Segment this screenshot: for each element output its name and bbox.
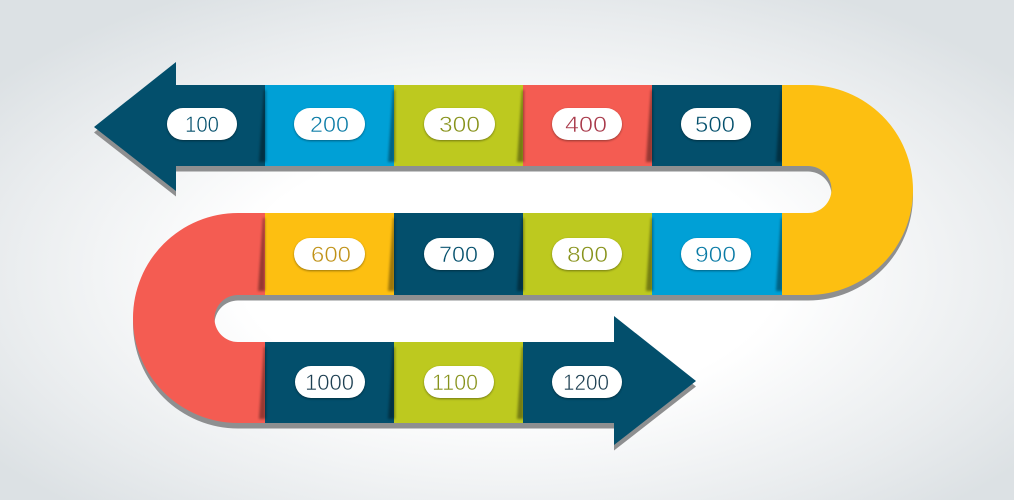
arrow head left: [94, 62, 265, 191]
row 1: arrow head and segments: [94, 62, 782, 191]
label 1100: [424, 366, 494, 398]
label 800: 800: [567, 242, 608, 267]
label 900: [681, 238, 751, 270]
path drop shadow: [94, 68, 913, 450]
label 1200: [552, 366, 622, 398]
label 1100: 1100: [432, 370, 478, 395]
row 2 segments: [264, 213, 782, 295]
segment 300: [394, 85, 523, 166]
label 500: [681, 108, 751, 140]
label 200: 200: [310, 112, 349, 137]
segment 400: [523, 85, 652, 166]
segment 1100: [394, 342, 523, 423]
label 400: [552, 108, 622, 140]
label 800: [552, 238, 622, 270]
label 500: 500: [695, 112, 735, 137]
label 400: 400: [565, 112, 607, 137]
segment 600: [264, 213, 394, 295]
segment 900: [652, 213, 782, 295]
segment 800: [523, 213, 652, 295]
label 600: [294, 238, 365, 270]
label 200: [294, 108, 365, 140]
label 1200: 1200: [563, 370, 609, 395]
label 100: 100: [185, 112, 219, 137]
label 100: [167, 108, 237, 140]
segment 1000: [265, 342, 394, 423]
label 700: [424, 238, 494, 270]
label 1000: [295, 366, 365, 398]
yellow U turn: [782, 85, 913, 295]
segment 500: [652, 85, 782, 166]
segment edge shadows: [259, 90, 783, 162]
pill shadows: [167, 109, 751, 399]
red U turn: [133, 213, 265, 423]
label 300: [424, 108, 495, 140]
label 1000: 1000: [305, 370, 354, 395]
segment 700: [394, 213, 523, 295]
label 600: 600: [311, 242, 351, 267]
arrow head right: [523, 316, 696, 445]
segment 200: [265, 85, 394, 166]
label 300: 300: [439, 112, 480, 137]
label 900: 900: [695, 242, 736, 267]
label 700: 700: [439, 242, 478, 267]
row 3 segments: [265, 316, 696, 445]
